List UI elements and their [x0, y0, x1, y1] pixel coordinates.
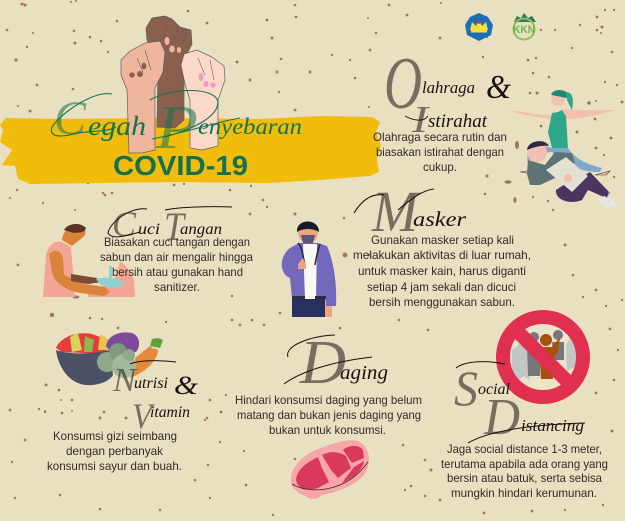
text: Social Distancing body: bersin atau batuk, serta sebisa — [447, 471, 602, 485]
text: Olahraga body: Olahraga secara rutin dan — [373, 130, 507, 144]
text: Social Distancing body: terutama apabila ada orang yang — [441, 457, 608, 471]
logo: KKN — [513, 13, 536, 40]
illustration: three raised fists — [121, 16, 225, 153]
text: Daging body: bukan untuk konsumsi. — [269, 423, 386, 437]
heading: Nutrisi & Vitamin — [112, 361, 199, 436]
heading: Cuci Tangan: uci — [138, 221, 160, 238]
heading: Cuci Tangan: C — [112, 204, 137, 244]
icon: brown fist — [146, 16, 192, 128]
logo: KKN: KKN — [513, 24, 535, 36]
text: Social Distancing body: Jaga social distance 1-3 meter, — [447, 442, 602, 456]
heading: Cuci Tangan: T — [164, 204, 186, 249]
heading: Social Distancing: D — [483, 389, 520, 446]
text: Olahraga body: cukup. — [423, 160, 457, 174]
heading: Social Distancing: istancing — [521, 416, 584, 435]
heading: Olahraga & Istirahat: lahraga — [422, 78, 475, 97]
title: Cegah Penyebaran: egah — [88, 111, 146, 141]
icon: crowd — [512, 330, 577, 380]
text: Masker body: Gunakan masker setiap kali — [371, 233, 514, 247]
text: Cuci Tangan body: bersih atau gunakan hand — [112, 265, 243, 279]
heading: Daging: D — [299, 329, 346, 397]
icon: left fist — [121, 41, 165, 153]
heading: Nutrisi & Vitamin: itamin — [150, 404, 190, 421]
text: Social Distancing body — [441, 442, 608, 500]
text: Social Distancing body: mungkin hindari kerumunan. — [451, 486, 597, 500]
title: Cegah Penyebaran: enyebaran — [198, 114, 302, 139]
heading: Olahraga & Istirahat: O — [384, 43, 422, 125]
heading: Olahraga & Istirahat — [384, 43, 512, 141]
text: Cuci Tangan body: sanitizer. — [154, 280, 200, 294]
illustration: woman balancing on a reclining man — [508, 90, 616, 208]
title: COVID-19: COVID-19 — [113, 150, 248, 181]
text: Daging body: Hindari konsumsi daging yang belum — [235, 393, 422, 407]
icon: no crowd sign — [503, 317, 583, 397]
heading: Nutrisi & Vitamin: V — [132, 396, 156, 436]
text: Nutrisi body — [47, 429, 182, 473]
illustration: bowl of fruit and vegetables — [56, 332, 163, 385]
text: Nutrisi body: konsumsi sayur dan buah. — [47, 459, 182, 473]
text: Masker body: setiap 4 jam sekali dan dicuci — [367, 280, 516, 294]
title: Cegah Penyebaran: C — [54, 92, 87, 145]
text: Olahraga body: biasakan istirahat dengan — [376, 145, 504, 159]
yellow brush band — [0, 116, 381, 184]
text: Cuci Tangan body: sabun dan air mengalir hingga — [100, 250, 253, 264]
heading: Olahraga & Istirahat: & — [486, 69, 512, 106]
text: Masker body: bersih menggunakan sabun. — [369, 295, 515, 309]
illustration: man wearing a mask — [282, 222, 336, 317]
text: Masker body — [353, 233, 531, 309]
heading: Olahraga & Istirahat: I — [411, 99, 431, 141]
heading: Social Distancing: ocial — [478, 381, 511, 398]
heading: Masker: asker — [413, 207, 467, 231]
text: Masker body: melakukan aktivitas di luar rumah, — [353, 248, 531, 262]
heading: Masker — [354, 179, 467, 244]
heading: Social Distancing: S — [454, 360, 478, 416]
title: Cegah Penyebaran: P — [155, 94, 198, 162]
text: Nutrisi body: Konsumsi gizi seimbang — [53, 429, 177, 443]
text: Daging body — [235, 393, 422, 437]
heading: Nutrisi & Vitamin: & — [174, 371, 199, 400]
illustration: man washing hands — [43, 224, 135, 297]
title: Cegah Penyebaran — [51, 90, 302, 162]
heading: Cuci Tangan — [108, 204, 232, 249]
text: Masker body: untuk masker kain, harus diganti — [358, 264, 526, 278]
text: Nutrisi body: dengan perbanyak — [66, 444, 164, 458]
heading: Nutrisi & Vitamin: utrisi — [134, 375, 168, 392]
heading: Daging: aging — [340, 362, 388, 384]
logo: university crest — [465, 13, 493, 41]
heading: Masker: M — [371, 179, 421, 244]
illustration: steak — [291, 440, 369, 499]
heading: Cuci Tangan: angan — [180, 221, 222, 238]
heading: Olahraga & Istirahat: stirahat — [428, 111, 488, 132]
heading: Social Distancing — [454, 360, 585, 446]
heading: Daging — [284, 329, 388, 397]
text: Daging body: matang dan bukan jenis daging yang — [237, 408, 421, 422]
heading: Nutrisi & Vitamin: N — [112, 362, 138, 399]
text: Olahraga body — [373, 130, 507, 174]
text: Cuci Tangan body: Biasakan cuci tangan dengan — [104, 235, 250, 249]
icon: right fist — [181, 50, 225, 150]
text: Cuci Tangan body — [100, 235, 253, 294]
